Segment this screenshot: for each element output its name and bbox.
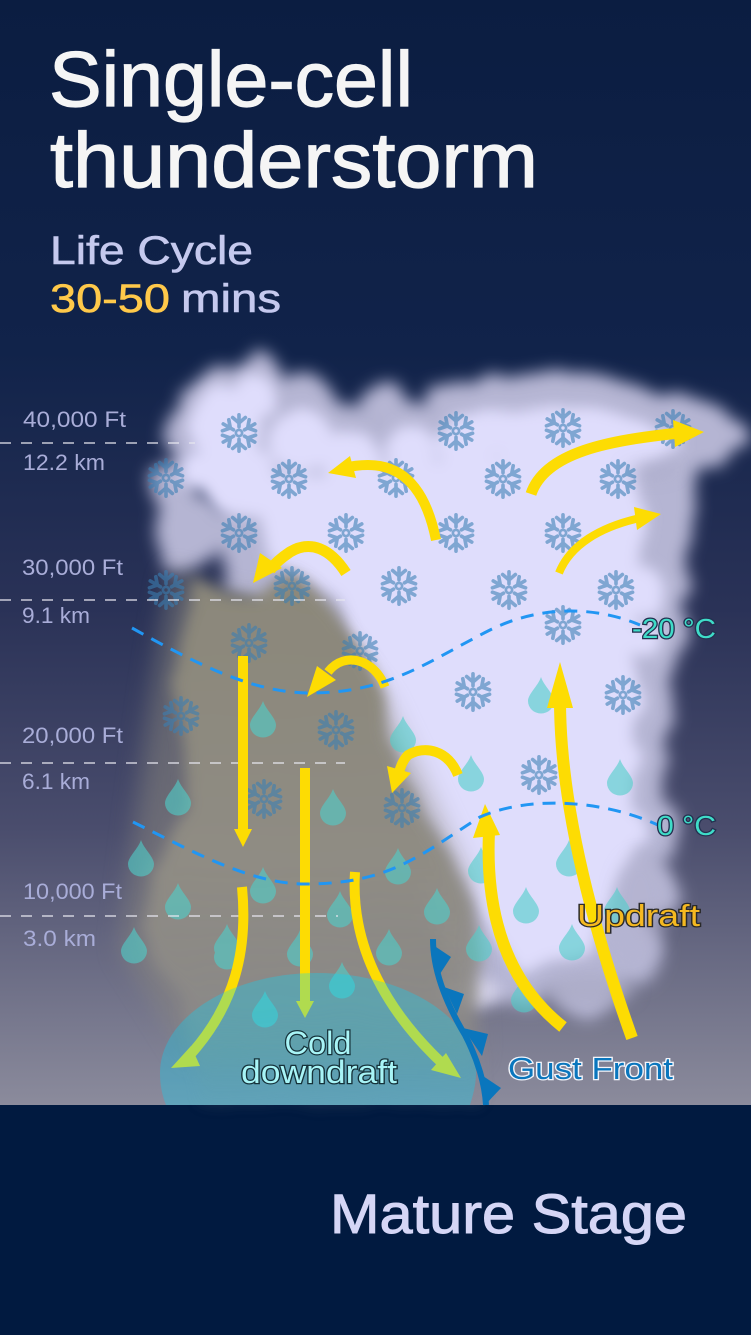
- altitude labels: 9.1 km: [22, 603, 90, 628]
- storm cloud: [120, 353, 750, 1105]
- altitude labels: 10,000 Ft: [23, 879, 122, 904]
- arrow: left outflow: [171, 887, 243, 1068]
- title: Single-cell: [49, 35, 413, 123]
- subtitle: life cycle: mins: [181, 277, 281, 321]
- altitude dashed lines: [0, 443, 345, 916]
- stage label: Mature Stage: [330, 1182, 687, 1245]
- yellow airflow arrows: [171, 420, 704, 1078]
- temperature labels: [632, 613, 716, 841]
- label: cold downdraft: [241, 1025, 397, 1090]
- arrow: left straight downdraft: [234, 656, 252, 847]
- subtitle: life cycle: [50, 229, 281, 321]
- arrow: right outflow: [355, 872, 461, 1078]
- label: gust front: Gust Front: [508, 1051, 673, 1086]
- cloud core: [178, 375, 682, 975]
- altitude labels: 40,000 Ft: [23, 407, 126, 432]
- arrow: lower curl: [387, 750, 458, 793]
- arrow: left updraft: [473, 804, 563, 1027]
- gust front line: [433, 939, 501, 1105]
- arrow: middle curl: [307, 660, 385, 697]
- cloud shaded puffs: [440, 463, 676, 1006]
- altitude labels: 12.2 km: [23, 450, 105, 475]
- label: cold downdraft: downdraft: [241, 1054, 397, 1090]
- ground band: [0, 1105, 751, 1335]
- title: [49, 35, 538, 204]
- arrow: center downdraft: [296, 768, 314, 1018]
- arrow: top right outflow: [531, 420, 704, 494]
- subtitle: life cycle: 30-50: [50, 277, 170, 321]
- subtitle: life cycle: Life Cycle: [50, 229, 253, 273]
- label: cold downdraft: Cold: [284, 1025, 352, 1061]
- snowflakes: [147, 410, 692, 826]
- cold downdraft pool: [160, 973, 476, 1105]
- cloud halo: [148, 353, 750, 1018]
- altitude labels: 20,000 Ft: [22, 723, 123, 748]
- title: thunderstorm: [50, 116, 538, 204]
- altitude labels: 3.0 km: [23, 926, 96, 951]
- raindrops: [121, 677, 633, 1028]
- arrow: upper left curl: [328, 456, 436, 540]
- isotherm dashed lines: [132, 611, 660, 884]
- brown haze: [120, 570, 478, 1060]
- temperature labels: 0 °C: [657, 810, 716, 841]
- arrow: brown top curl: [253, 547, 346, 583]
- arrow: right updraft: [547, 662, 632, 1038]
- arrow: mid right outflow: [559, 507, 661, 573]
- altitude labels: 30,000 Ft: [22, 555, 123, 580]
- altitude labels: 6.1 km: [22, 769, 90, 794]
- label: updraft: Updraft: [577, 898, 700, 933]
- brown rain core: [144, 576, 480, 1105]
- temperature labels: -20 °C: [632, 613, 716, 644]
- altitude labels: [22, 407, 126, 951]
